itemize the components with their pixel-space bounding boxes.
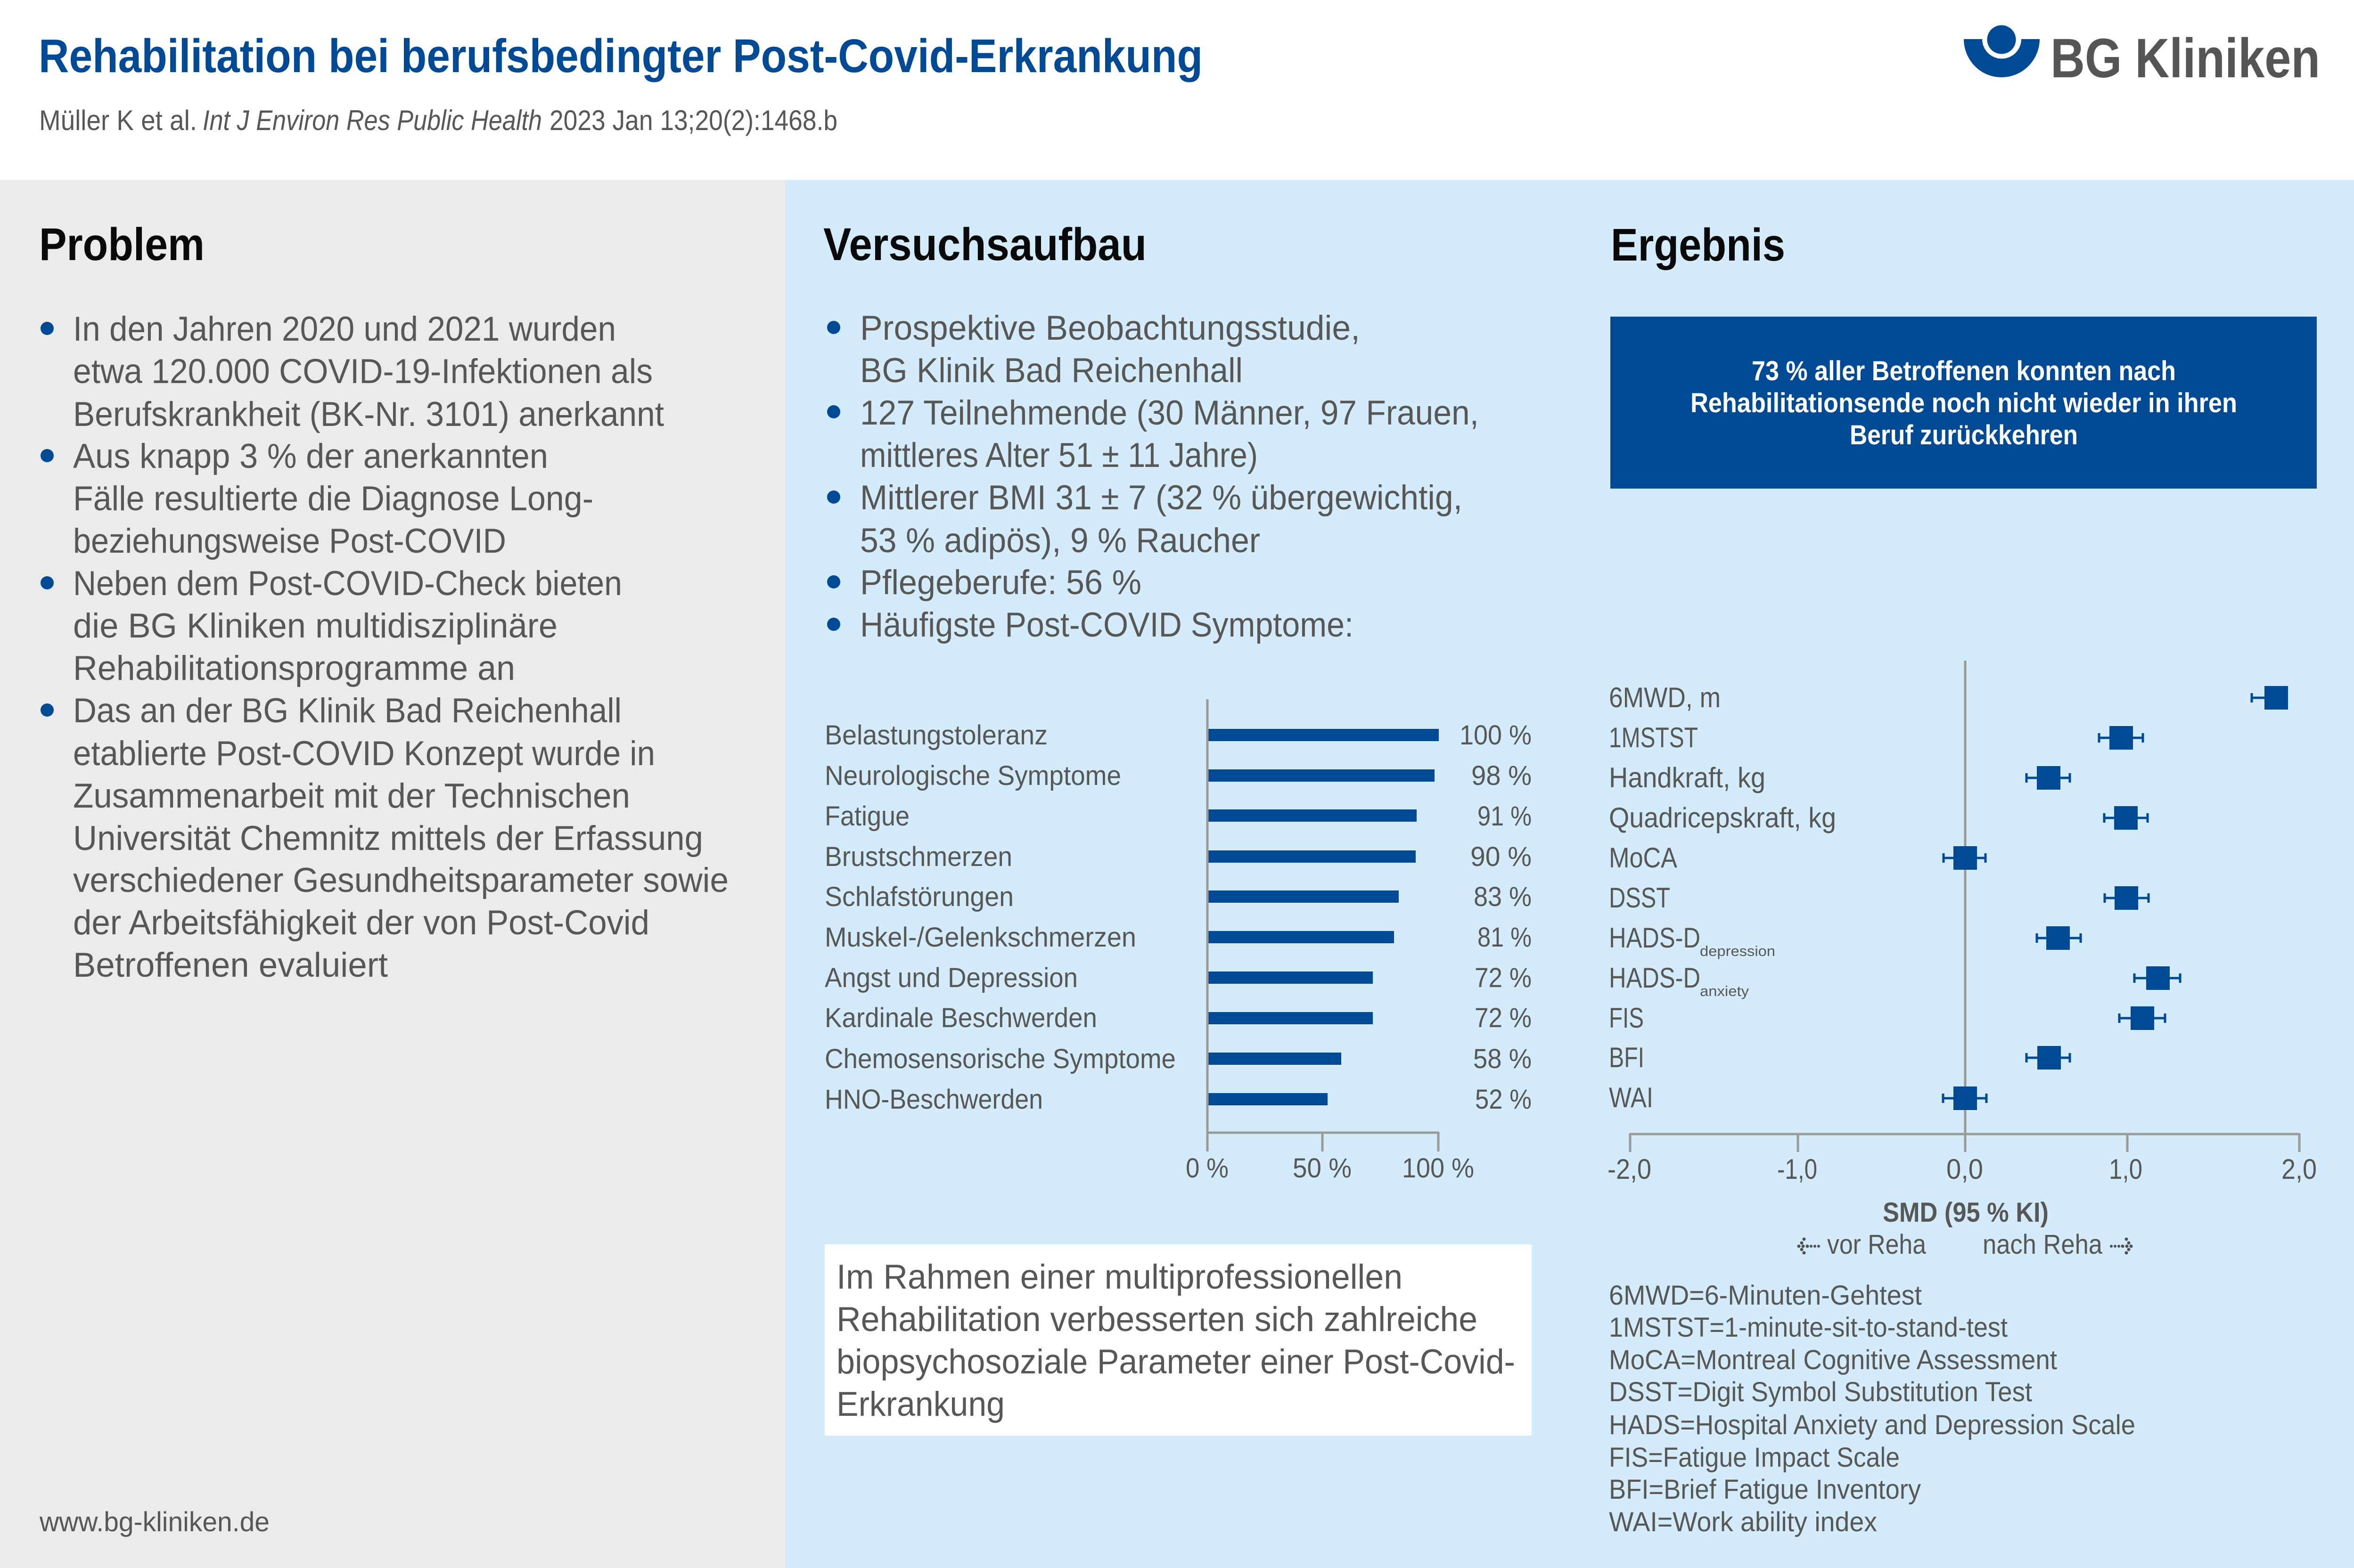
symptom labels: Fatigue — [825, 801, 910, 832]
bar values: 83 % — [1474, 882, 1532, 912]
symptom labels: Muskel-/Gelenkschmerzen — [825, 922, 1136, 953]
heading: Problem: Problem — [39, 219, 205, 270]
bullet list: study design: 53 % adipös), 9 % Raucher — [860, 522, 1260, 560]
symptom labels: Belastungstoleranz — [825, 720, 1048, 751]
forest plot — [1608, 661, 2317, 1260]
confidence interval whiskers — [1943, 693, 2264, 1103]
forest plot labels: HADS-D — [1609, 922, 1700, 954]
bullet list: problem: Betroffenen evaluiert — [73, 946, 388, 984]
effect size markers — [1953, 686, 2288, 1110]
bar values: 98 % — [1471, 760, 1532, 791]
forest plot labels: 6MWD, m — [1609, 682, 1721, 713]
arrow: vor Reha: vor Reha — [1827, 1229, 1927, 1260]
title: Rehabilitation bei berufsbedingter Post-Covid-Erkrankung — [39, 30, 1203, 82]
forest plot labels: depression — [1700, 943, 1775, 959]
citation: 2023 Jan 13;20(2):1468.b — [550, 105, 837, 136]
bullet list: study design: BG Klinik Bad Reichenhall — [860, 351, 1243, 390]
abbreviation legend: 1MSTST=1-minute-sit-to-stand-test — [1609, 1312, 2008, 1343]
citation — [39, 105, 837, 136]
panel: problem background — [0, 180, 786, 1568]
bullet list: problem: Rehabilitationsprogramme an — [73, 649, 515, 687]
symptom labels: Brustschmerzen — [825, 841, 1012, 872]
bar values: 100 % — [1460, 720, 1532, 751]
bullet list: study design: Mittlerer BMI 31 ± 7 (32 % übergewichtig, — [860, 479, 1462, 517]
bullet list: problem: Aus knapp 3 % der anerkannten — [73, 437, 548, 475]
bullet list: study design: mittleres Alter 51 ± 11 Jahre) — [860, 436, 1258, 474]
bullet list: problem: Zusammenarbeit mit der Technischen — [73, 777, 630, 815]
bar values — [1460, 720, 1532, 1115]
bar chart: symptoms — [825, 699, 1532, 1184]
panel: Ergebnis — [1608, 219, 2317, 1537]
bar values: 72 % — [1475, 1003, 1532, 1033]
symptom labels: Neurologische Symptome — [825, 760, 1121, 791]
bullet list: study design: Prospektive Beobachtungsstudie, — [860, 309, 1360, 347]
bullet list: problem: Das an der BG Klinik Bad Reichenhall — [73, 692, 622, 730]
footer url: www.bg-kliniken.de — [39, 1507, 270, 1537]
panel: study design and results background — [786, 180, 2354, 1568]
abbreviation legend: DSST=Digit Symbol Substitution Test — [1609, 1377, 2032, 1407]
abbreviation legend: WAI=Work ability index — [1609, 1507, 1877, 1537]
bar chart axes: 50 % — [1293, 1153, 1352, 1184]
panel: problem — [39, 219, 729, 1537]
bullet list: study design: 127 Teilnehmende (30 Männer, 97 Frauen, — [860, 394, 1479, 432]
abbreviation legend: MoCA=Montreal Cognitive Assessment — [1609, 1345, 2057, 1375]
heading: Ergebnis: Ergebnis — [1611, 219, 1785, 270]
forest plot labels: Handkraft, kg — [1609, 762, 1765, 793]
key result box — [1610, 317, 2317, 489]
bullet list: problem: beziehungsweise Post-COVID — [73, 522, 506, 560]
abbreviation legend — [1609, 1280, 2135, 1537]
forest plot axes — [1608, 661, 2317, 1185]
forest plot axes: 0,0 — [1946, 1153, 1983, 1185]
bullet list: problem: die BG Kliniken multidisziplinäre — [73, 607, 558, 645]
bar values: 81 % — [1477, 922, 1532, 953]
forest plot labels: WAI — [1609, 1082, 1653, 1113]
forest plot axes: 1,0 — [2109, 1153, 2142, 1185]
bullet list: problem: etwa 120.000 COVID-19-Infektionen als — [73, 352, 653, 391]
bullet list: problem: Berufskrankheit (BK-Nr. 3101) anerkannt — [73, 395, 664, 433]
callout: conclusion: Erkrankung — [837, 1385, 1005, 1423]
bullet list: problem: der Arbeitsfähigkeit der von Post-Covid — [73, 904, 649, 942]
symptom labels — [825, 720, 1176, 1115]
forest plot labels: DSST — [1609, 882, 1670, 914]
forest plot axes: -2,0 — [1608, 1153, 1651, 1185]
bullet list: problem: Fälle resultierte die Diagnose Long- — [73, 480, 593, 518]
panel: Versuchsaufbau — [823, 219, 1532, 1436]
symptom labels: HNO-Beschwerden — [825, 1084, 1043, 1115]
symptom labels: Chemosensorische Symptome — [825, 1044, 1176, 1074]
abbreviation legend: HADS=Hospital Anxiety and Depression Scale — [1609, 1410, 2135, 1440]
forest plot labels: anxiety — [1700, 983, 1749, 999]
key result box: Rehabilitationsende noch nicht wieder in ihren — [1690, 388, 2237, 418]
heading: Versuchsaufbau: Versuchsaufbau — [823, 219, 1147, 270]
callout: conclusion: Rehabilitation verbesserten sich zahlreiche — [837, 1300, 1477, 1339]
abbreviation legend: FIS=Fatigue Impact Scale — [1609, 1442, 1900, 1473]
callout: conclusion: biopsychosoziale Parameter einer Post-Covid- — [837, 1343, 1515, 1381]
citation: Int J Environ Res Public Health — [203, 105, 542, 136]
symptom labels: Kardinale Beschwerden — [825, 1003, 1097, 1033]
bar values: 58 % — [1473, 1044, 1532, 1074]
callout: conclusion — [825, 1244, 1532, 1436]
bullet list: study design: Häufigste Post-COVID Symptome: — [860, 606, 1353, 644]
forest plot labels: MoCA — [1609, 842, 1677, 874]
symptom labels: Angst und Depression — [825, 963, 1078, 993]
key result box: Beruf zurückkehren — [1850, 420, 2078, 450]
bullet list: study design — [827, 309, 1479, 644]
forest plot labels: FIS — [1609, 1002, 1644, 1034]
bar values: 91 % — [1477, 801, 1532, 832]
bar chart axes: 0 % — [1186, 1153, 1229, 1184]
bullet list: problem: etablierte Post-COVID Konzept wurde in — [73, 735, 655, 773]
forest plot labels: HADS-D — [1609, 962, 1700, 994]
bullet list: problem: Neben dem Post-COVID-Check bieten — [73, 564, 622, 603]
bullet list: problem: verschiedener Gesundheitsparameter sowie — [73, 861, 729, 899]
forest plot labels: Quadricepskraft, kg — [1609, 802, 1836, 833]
bar values: 90 % — [1470, 841, 1532, 872]
abbreviation legend: BFI=Brief Fatigue Inventory — [1609, 1474, 1921, 1505]
bar chart axes — [1186, 699, 1474, 1184]
symptom labels: Schlafstörungen — [825, 882, 1014, 912]
forest plot labels — [1609, 682, 1836, 1113]
arrow: nach Reha: nach Reha — [1983, 1229, 2103, 1260]
callout: conclusion: Im Rahmen einer multiprofessionellen — [837, 1258, 1403, 1296]
abbreviation legend: 6MWD=6-Minuten-Gehtest — [1609, 1280, 1922, 1311]
bar chart axes: 100 % — [1402, 1153, 1474, 1184]
bullet list: problem: Universität Chemnitz mittels der Erfassung — [73, 819, 703, 858]
forest plot axes: -1,0 — [1777, 1153, 1817, 1185]
bar values: 52 % — [1475, 1084, 1532, 1115]
axis title: SMD (95 % KI) — [1883, 1197, 2049, 1228]
citation: Müller K et al. — [39, 105, 197, 136]
logo: BG Kliniken — [1964, 25, 2320, 90]
bullet list: study design: Pflegeberufe: 56 % — [860, 564, 1141, 602]
forest plot axes: 2,0 — [2281, 1153, 2317, 1185]
forest plot labels: 1MSTST — [1609, 722, 1698, 753]
bullet list: problem — [41, 310, 729, 984]
forest plot labels: BFI — [1609, 1042, 1644, 1073]
key result box: 73 % aller Betroffenen konnten nach — [1752, 356, 2176, 386]
bars — [1207, 729, 1439, 1105]
bar values: 72 % — [1475, 963, 1532, 993]
bullet list: problem: In den Jahren 2020 und 2021 wurden — [73, 310, 616, 348]
